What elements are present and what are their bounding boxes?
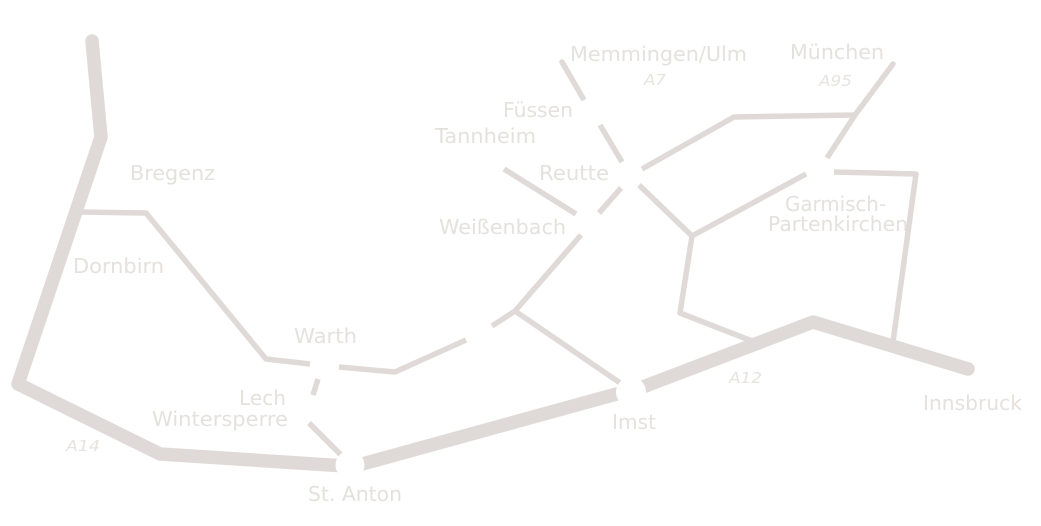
road: Reutte to Weissenbach bbox=[599, 188, 621, 213]
label: Garmisch-Partenkirchen bbox=[768, 192, 908, 236]
label: Warth: Warth bbox=[294, 324, 357, 348]
road number: A95: A95 bbox=[818, 72, 852, 90]
road: A12 motorway east bbox=[635, 322, 968, 390]
label: Imst: Imst bbox=[612, 410, 656, 434]
road number: A14: A14 bbox=[65, 437, 100, 455]
road: Garmisch to Innsbruck bbox=[834, 172, 916, 342]
label: Tannheim: Tannheim bbox=[434, 124, 536, 148]
junction: Imst bbox=[616, 377, 646, 407]
label: Bregenz: Bregenz bbox=[130, 161, 215, 185]
road: Garmisch to A95 bbox=[827, 115, 855, 158]
road: Dornbirn to Warth bbox=[80, 212, 310, 364]
road: Warth to Weissenbach bbox=[339, 235, 581, 372]
road: link to A12 bbox=[680, 236, 752, 341]
road: Memmingen bbox=[559, 59, 622, 162]
road: Lech bbox=[309, 379, 346, 460]
road: A14 motorway west bbox=[18, 41, 345, 466]
label: Memmingen/Ulm: Memmingen/Ulm bbox=[570, 42, 747, 66]
road: Tannheim bbox=[504, 169, 576, 214]
label: Fuessen: Füssen bbox=[503, 98, 573, 122]
road: Arlberg to Imst bbox=[355, 390, 631, 466]
road number: A12: A12 bbox=[728, 369, 762, 387]
label: Muenchen: München bbox=[790, 40, 884, 64]
label: St. Anton: St. Anton bbox=[308, 482, 402, 506]
road: to Imst bbox=[515, 311, 626, 387]
road: Reutte to Garmisch bbox=[639, 174, 806, 236]
road: Reutte to Muenchen bbox=[642, 61, 896, 169]
label: Dornbirn: Dornbirn bbox=[73, 254, 164, 278]
label: Reutte: Reutte bbox=[539, 161, 609, 185]
label: Garmisch-Partenkirchen: Garmisch- bbox=[785, 192, 886, 216]
label: Wintersperre: Wintersperre bbox=[152, 407, 288, 431]
label: Innsbruck: Innsbruck bbox=[923, 391, 1022, 415]
road number: A7: A7 bbox=[643, 71, 666, 89]
label: Weissenbach: Weißenbach bbox=[439, 215, 566, 239]
label: Garmisch-Partenkirchen: Partenkirchen bbox=[768, 212, 908, 236]
label: Lech: Lech bbox=[239, 386, 286, 410]
junction: St. Anton bbox=[336, 450, 364, 480]
